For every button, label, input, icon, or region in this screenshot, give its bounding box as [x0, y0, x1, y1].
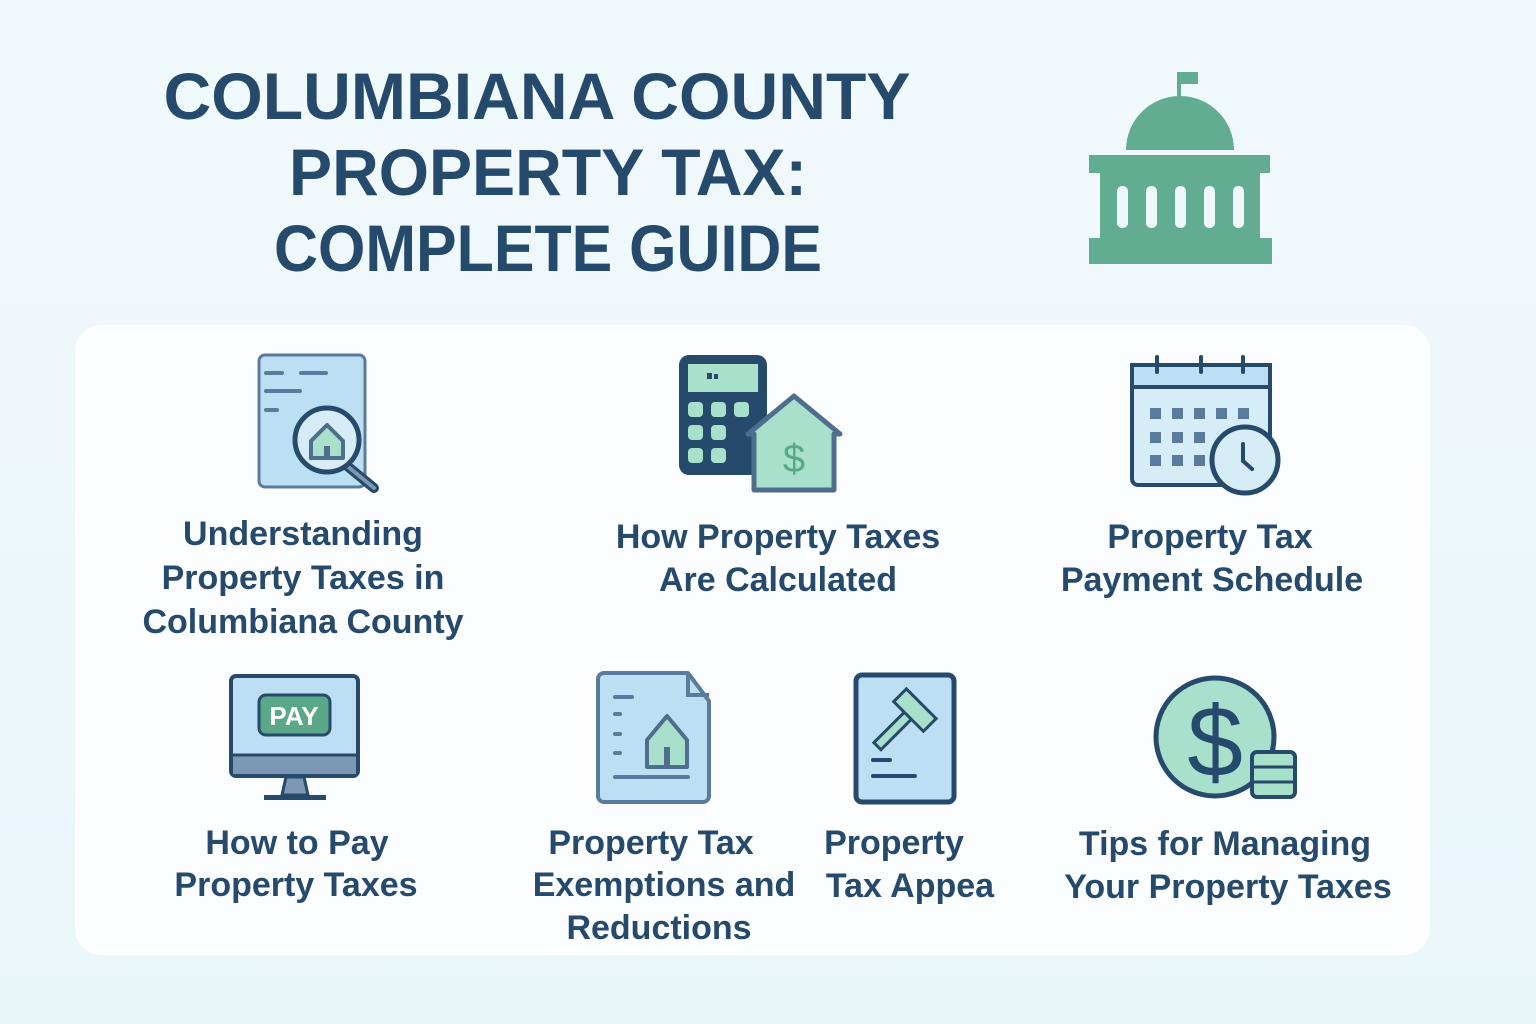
label: understanding: Property Taxes in	[162, 559, 444, 597]
icon: calendar with clock	[1132, 357, 1278, 493]
label: understanding	[142, 515, 464, 641]
title: COMPLETE GUIDE	[274, 211, 822, 285]
label: understanding: Understanding	[183, 515, 423, 553]
label: appeal: Property	[824, 824, 964, 862]
icon: dollar coin	[1156, 678, 1295, 798]
label: calculated	[616, 518, 940, 599]
label: understanding: Columbiana County	[142, 603, 464, 641]
icon: document with magnifier	[259, 355, 374, 488]
title: PROPERTY TAX:	[289, 135, 807, 209]
label: exemptions: Property Tax	[548, 824, 754, 862]
icon: courthouse	[1089, 72, 1272, 264]
label: appeal: Tax Appea	[826, 867, 995, 905]
icon: pay monitor: PAY	[269, 701, 319, 731]
label: exemptions: Reductions	[566, 909, 752, 947]
label: exemptions	[533, 824, 795, 947]
label: schedule: Payment Schedule	[1061, 561, 1363, 599]
title: COLUMBIANA COUNTY	[164, 59, 910, 133]
label: how to pay	[174, 824, 418, 904]
icon: calculator with house: $	[783, 437, 805, 481]
icon: appeal gavel	[856, 675, 954, 802]
icon: calculator with house	[679, 355, 840, 490]
icon: dollar coin: $	[1187, 686, 1243, 798]
label: schedule: Property Tax	[1107, 518, 1313, 556]
icon: exemption document	[598, 673, 709, 802]
label: exemptions: Exemptions and	[533, 866, 795, 904]
label: tips	[1064, 825, 1392, 906]
label: calculated: Are Calculated	[659, 561, 897, 599]
label: schedule	[1061, 518, 1363, 599]
label: tips: Your Property Taxes	[1064, 868, 1392, 906]
icon: pay monitor	[231, 676, 358, 800]
title	[164, 59, 910, 285]
label: how to pay: Property Taxes	[174, 866, 418, 904]
label: how to pay: How to Pay	[205, 824, 389, 862]
label: appeal	[824, 824, 995, 905]
label: tips: Tips for Managing	[1079, 825, 1371, 863]
label: calculated: How Property Taxes	[616, 518, 940, 556]
panel: topics	[75, 325, 1430, 955]
